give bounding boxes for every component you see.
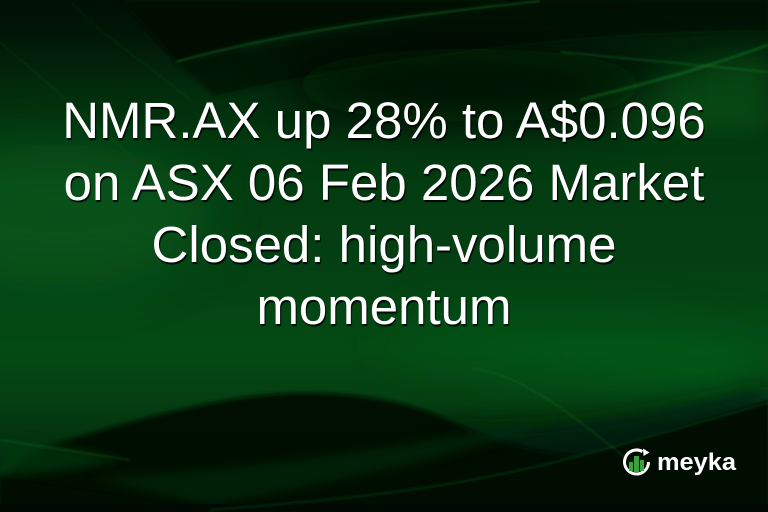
wordmark: meyka xyxy=(657,449,737,476)
bottom black sweep xyxy=(0,400,768,512)
lighter left band below the hill edge xyxy=(0,437,120,476)
logo: meyka xyxy=(623,448,737,476)
left glow xyxy=(0,145,210,285)
dark top wedge above arc xyxy=(120,0,540,62)
bottom edge xyxy=(0,504,768,512)
right dark shading of bottom xyxy=(440,385,768,512)
title: Closed: high-volume xyxy=(152,216,616,273)
title: NMR.AX up 28% to A$0.096 xyxy=(62,92,706,149)
title: on ASX 06 Feb 2026 Market xyxy=(64,154,704,211)
mid sheen under hill xyxy=(90,415,560,505)
lower right glow xyxy=(400,329,768,410)
dark hill and floor xyxy=(0,393,640,512)
dark band beneath upper arc xyxy=(176,0,768,97)
title: momentum xyxy=(256,278,512,335)
icon: circular arrow with bars xyxy=(624,448,650,474)
top-left fade xyxy=(0,0,240,90)
title xyxy=(62,92,706,335)
dark blob under second arc xyxy=(280,49,660,121)
right upper glow xyxy=(600,55,768,130)
